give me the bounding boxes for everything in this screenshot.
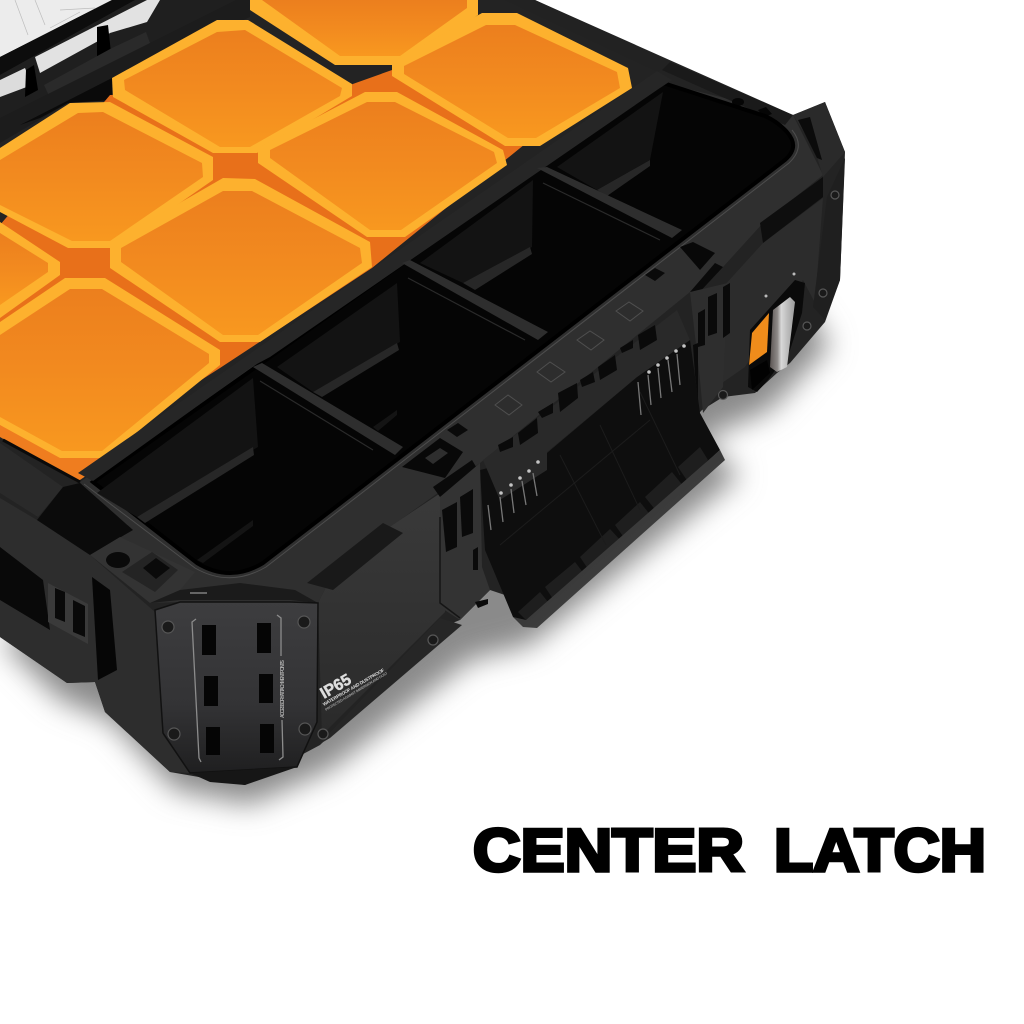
bin 2 wall and ridges	[277, 283, 400, 431]
divider shadow lines	[260, 183, 660, 450]
hinge clips	[498, 325, 657, 452]
bin 1 wall and ridges	[97, 378, 258, 563]
deck strip	[307, 523, 403, 590]
right corner cap	[760, 102, 845, 320]
mold squares	[495, 302, 643, 415]
screws	[162, 191, 839, 740]
bin lip highlight	[84, 130, 798, 578]
cell: left upper	[0, 102, 213, 248]
left clips	[48, 583, 88, 644]
latch flap	[480, 340, 720, 625]
panel: center latch	[480, 302, 725, 628]
IP65 label: WATERPROOF AND DUSTPROOF	[322, 667, 385, 707]
lower flange	[318, 618, 462, 745]
bin 3 wall and ridges	[420, 180, 533, 290]
cell: lower middle	[110, 178, 372, 342]
left bin lip	[3, 440, 80, 482]
flap floor pads	[518, 447, 708, 620]
latch release	[748, 272, 805, 392]
panel: top deck	[80, 82, 823, 603]
right side trim	[813, 158, 845, 320]
top rail	[662, 62, 793, 125]
release opening	[750, 360, 770, 390]
label: LATCH	[774, 817, 986, 884]
corner top details	[90, 537, 318, 603]
cell: center	[258, 92, 507, 237]
toolbox body	[0, 0, 845, 785]
panel: orange tray	[0, 0, 632, 482]
label: CENTER	[473, 817, 744, 884]
upper bin rim band	[78, 71, 672, 481]
deck shadow strip	[760, 177, 823, 243]
panel: left side face	[0, 498, 190, 773]
panel: right side face	[722, 198, 823, 383]
flap ribs	[500, 392, 680, 545]
IP65 label: PROTECTED AGAINST IMMERSION AND DUST	[324, 671, 389, 712]
cell: bottom left	[0, 278, 220, 458]
left deck	[0, 443, 63, 517]
cell: upper middle	[112, 20, 352, 153]
clear lid at top left	[0, 0, 250, 143]
orange button	[749, 313, 769, 365]
outer wall wedge	[0, 425, 112, 482]
bin 4 wall and ridges	[557, 92, 663, 196]
tray rail top right	[505, 0, 670, 72]
left handle recess	[0, 547, 50, 630]
cell: far left	[0, 222, 60, 318]
label	[473, 817, 986, 884]
attachment point label: ACCESSORY ATTACHMENT POINTS	[280, 659, 286, 718]
cell: top right	[392, 13, 632, 146]
panel: front face	[318, 490, 445, 735]
slots	[202, 623, 274, 755]
hinge teeth left	[488, 473, 537, 530]
silver handle	[770, 297, 795, 372]
tray base with junctions	[0, 70, 530, 470]
hinge notches	[402, 242, 723, 497]
cell: top	[250, 0, 478, 65]
divider bars	[253, 167, 682, 455]
panel: black bins	[78, 71, 798, 578]
clear latch strips	[0, 68, 32, 97]
body silhouette	[0, 0, 845, 785]
bracket lines	[192, 619, 201, 762]
drop shadow	[0, 300, 830, 805]
hinge block right	[690, 283, 730, 413]
indicator marks	[764, 272, 796, 298]
hinge block left	[440, 463, 490, 620]
black surround	[748, 280, 805, 392]
IP65 label: IP65	[318, 671, 355, 702]
left deck shade	[37, 483, 133, 555]
latch hinge band	[483, 310, 690, 500]
panel: corner plate	[155, 602, 318, 785]
bin interior	[93, 82, 793, 573]
handle lip	[513, 450, 725, 628]
hinge teeth right	[638, 354, 680, 415]
lower rail	[0, 0, 250, 143]
left slot	[92, 577, 117, 680]
